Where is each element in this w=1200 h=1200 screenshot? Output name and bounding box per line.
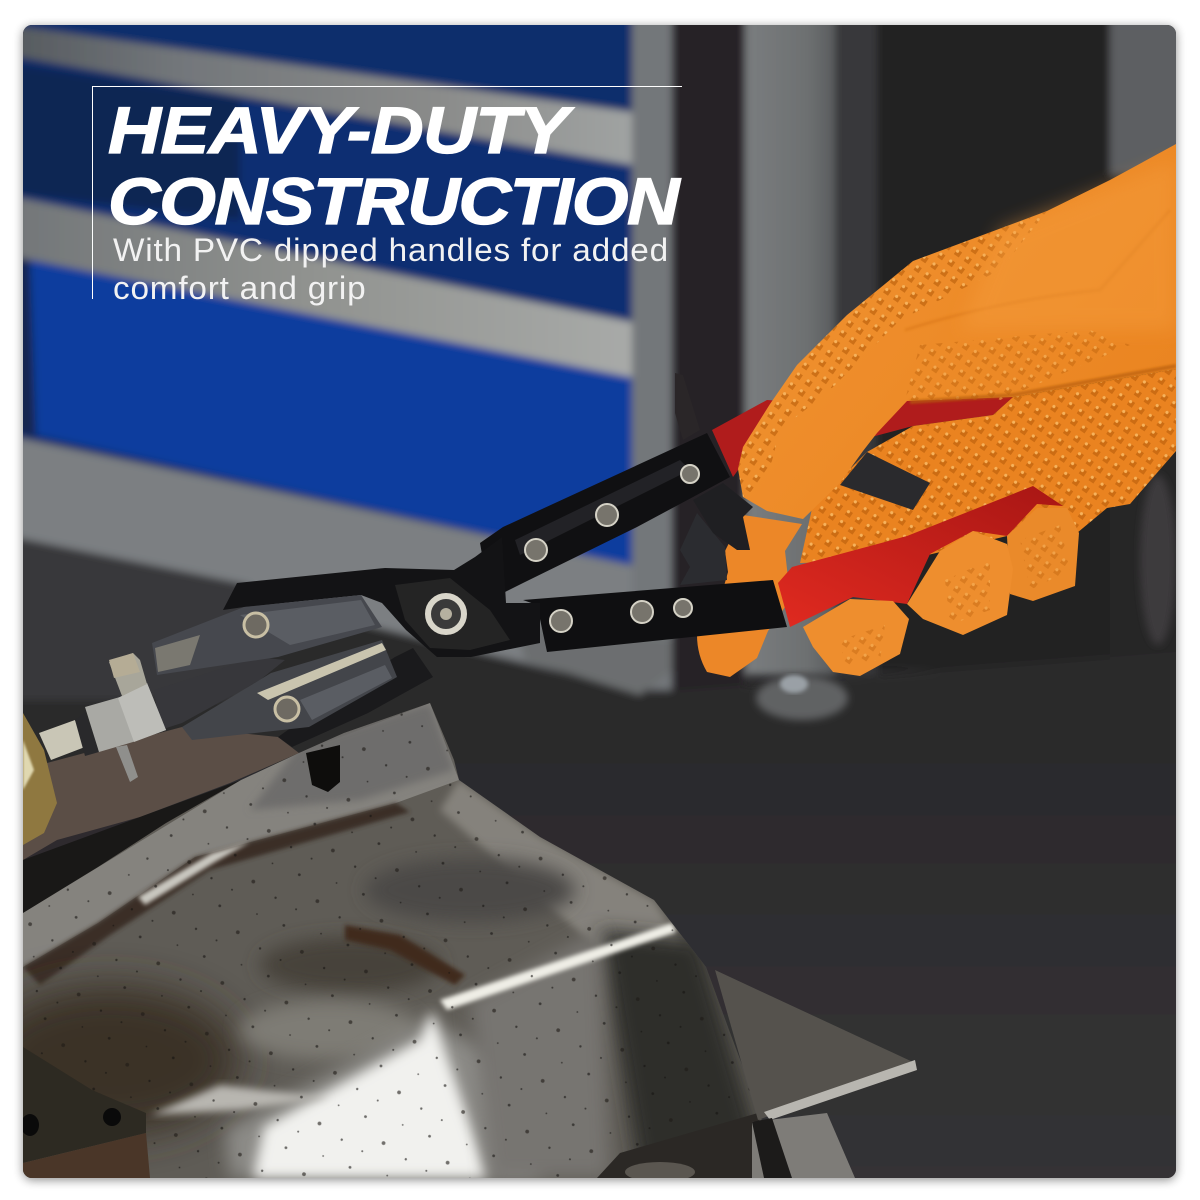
title line 2: CONSTRUCTION — [108, 164, 678, 238]
fingers — [1007, 508, 1079, 601]
title line 1: HEAVY-DUTY — [108, 93, 568, 167]
lower arm — [523, 580, 787, 652]
tool: black and red hose clamp pliers — [152, 373, 1013, 747]
heading block — [92, 86, 682, 299]
subtitle — [113, 232, 669, 306]
exhaust pipe and brass fitting — [23, 653, 299, 913]
lever — [712, 494, 753, 550]
upper jaw — [152, 595, 382, 675]
subtitle: comfort and grip — [113, 270, 366, 306]
thumb behind the tool — [697, 515, 802, 677]
palm — [800, 369, 1176, 563]
black finger lever — [840, 452, 930, 510]
top beak — [223, 552, 540, 657]
mounting wing and lower parts — [21, 970, 917, 1178]
spike — [675, 373, 678, 422]
dark gray jaw — [680, 513, 727, 585]
rivets — [244, 465, 699, 721]
lower arm beak — [278, 648, 433, 747]
red upper handle — [712, 397, 1013, 477]
lower jaw — [182, 640, 397, 740]
orange textured glove hand — [738, 144, 1176, 676]
exhaust heat shield: worn metal — [0, 700, 800, 1182]
back of hand and index finger — [738, 144, 1176, 519]
red lower handle — [778, 486, 1063, 627]
upper arm — [480, 433, 730, 600]
subtitle: With PVC dipped handles for added — [113, 232, 669, 268]
